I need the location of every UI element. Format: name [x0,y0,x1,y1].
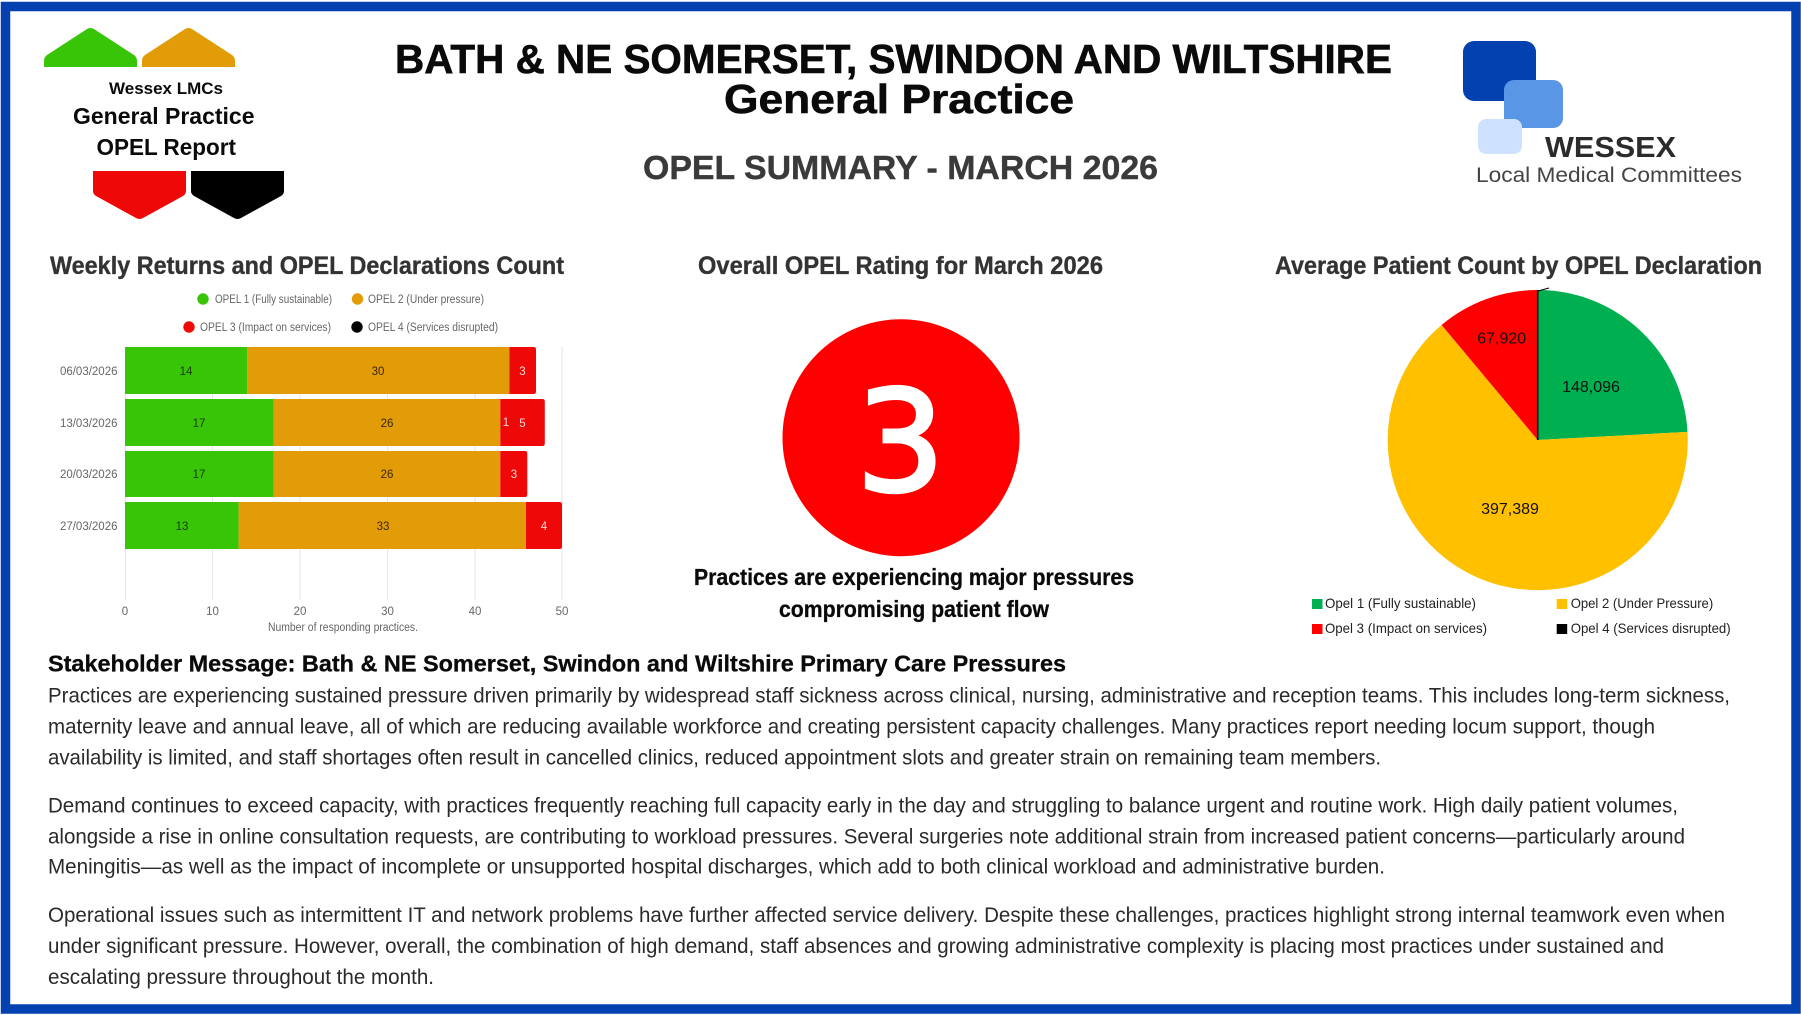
bar: 06/03/2026: 06/03/2026 [60,366,118,378]
panel: weekly returns chart [50,252,568,634]
title: General Practice [724,76,1074,122]
bar: 20/03/2026: 26 [381,469,393,481]
heading: stakeholder message: Stakeholder Message: Bath & NE Somerset, Swindon and Wiltshire Primary Care Pressures [48,650,1066,676]
pie chart: 67,920 [1477,330,1526,348]
rating badge: 3 [856,362,945,524]
paragraph 3: Operational issues such as intermittent IT and network problems have further affected service delivery. Despite these challenges, practices highlight strong internal teamwork even when [48,903,1725,927]
logo text: WESSEX: WESSEX [1545,132,1677,164]
bar: 20/03/2026: 17 [193,469,205,481]
bar: 27/03/2026: 27/03/2026 [60,521,118,533]
logo: Wessex LMCs OPEL report [44,28,284,219]
logo text: General Practice: General Practice [73,103,254,129]
paragraph 2 [48,794,1685,878]
x axis labels: 10 [206,606,219,618]
bar: 13/03/2026 [60,399,545,446]
bar: 20/03/2026 [60,451,527,497]
logo text: OPEL Report: OPEL Report [96,134,236,160]
paragraph 3: escalating pressure throughout the month. [48,965,434,989]
bar: 13/03/2026: 17 [193,418,205,430]
logo text: Local Medical Committees: Local Medical Committees [1476,164,1742,187]
subtitle: OPEL SUMMARY - MARCH 2026 [643,149,1158,186]
x axis labels: 20 [294,606,306,618]
paragraph 3 [48,903,1725,989]
bar: 13/03/2026: 5 [519,418,526,430]
rating caption [694,564,1134,622]
icon: green house [44,28,137,67]
pie legend: Opel 4 (Services disrupted) [1571,620,1731,636]
title [395,36,1392,122]
panel: stakeholder message [48,650,1730,989]
stacked bar chart [60,347,568,634]
paragraph 2: Demand continues to exceed capacity, with practices frequently reaching full capacity early in the day and struggling to balance urgent and routine work. High daily patient volumes, [48,794,1678,818]
pie legend: Opel 1 (Fully sustainable) [1325,595,1476,611]
x axis labels: 0 [122,606,128,618]
icon: dark blue square [1463,41,1536,101]
x axis labels: 30 [381,606,394,618]
panel: patient count pie [1275,252,1762,636]
chart legend: OPEL 3 (Impact on services) [200,322,331,334]
heading: weekly returns: Weekly Returns and OPEL Declarations Count [50,252,565,280]
bar: 06/03/2026: 14 [180,366,193,378]
chart legend: OPEL 2 (Under pressure) [368,294,484,306]
bar: 06/03/2026: 30 [372,366,384,378]
x axis labels: 50 [556,606,568,618]
paragraph 3: under significant pressure. However, overall, the combination of high demand, staff absences and growing administrative complexity is placing most practices under sustained and [48,934,1664,958]
bar: 20/03/2026: 20/03/2026 [60,469,118,481]
rating caption: compromising patient flow [779,596,1049,622]
rating caption: Practices are experiencing major pressures [694,564,1134,590]
pie legend: Opel 2 (Under Pressure) [1571,595,1713,611]
chart legend: OPEL 1 (Fully sustainable) [215,294,332,306]
pie legend [1312,595,1731,636]
icon: black pentagon [191,171,284,219]
icon: red pentagon [93,171,186,219]
bar: 20/03/2026: 3 [511,469,517,481]
pie chart: 148,096 [1562,379,1620,396]
icon: pale blue square [1478,119,1522,154]
bar: 27/03/2026: 33 [377,521,389,533]
panel: overall rating [694,252,1134,622]
heading: patient count: Average Patient Count by OPEL Declaration [1275,252,1762,280]
icon: amber house [142,28,235,67]
pie chart: 397,389 [1481,501,1539,518]
x axis title: Number of responding practices. [268,622,418,634]
chart legend [183,293,498,334]
bar: 27/03/2026: 4 [541,521,548,533]
bar: 27/03/2026: 13 [176,521,188,533]
bar: 13/03/2026: 1 [503,417,509,429]
pie legend: Opel 3 (Impact on services) [1325,620,1487,636]
pie chart [1388,288,1688,590]
rating badge [782,319,1020,556]
paragraph 2: Meningitis—as well as the impact of incomplete or unsupported hospital discharges, which add to both clinical workload and administrative burden. [48,854,1385,878]
bar: 06/03/2026 [60,347,536,394]
chart legend: OPEL 4 (Services disrupted) [368,322,498,334]
bar: 13/03/2026: 26 [381,418,393,430]
paragraph 1 [48,684,1730,770]
bar: 13/03/2026: 13/03/2026 [60,418,118,430]
logo: Wessex Local Medical Committees [1463,41,1742,187]
logo text: Wessex LMCs: Wessex LMCs [109,79,223,98]
title: BATH & NE SOMERSET, SWINDON AND WILTSHIRE [395,36,1392,82]
x axis labels: 40 [469,606,481,618]
x axis labels [122,606,568,618]
paragraph 1: maternity leave and annual leave, all of which are reducing available workforce and creating persistent capacity challenges. Many practices report needing locum support, though [48,714,1655,738]
heading: overall rating: Overall OPEL Rating for March 2026 [698,252,1103,280]
bar: 27/03/2026 [60,502,562,549]
icon: mid blue square [1504,80,1563,128]
paragraph 2: alongside a rise in online consultation requests, are contributing to workload pressures. Several surgeries note additional strain from increased patient concerns—particularly around [48,824,1685,848]
bar: 06/03/2026: 3 [519,366,526,378]
paragraph 1: availability is limited, and staff shortages often result in cancelled clinics, reduced appointment slots and greater strain on remaining team members. [48,746,1381,770]
paragraph 1: Practices are experiencing sustained pressure driven primarily by widespread staff sickness across clinical, nursing, administrative and reception teams. This includes long-term sickness, [48,684,1730,708]
